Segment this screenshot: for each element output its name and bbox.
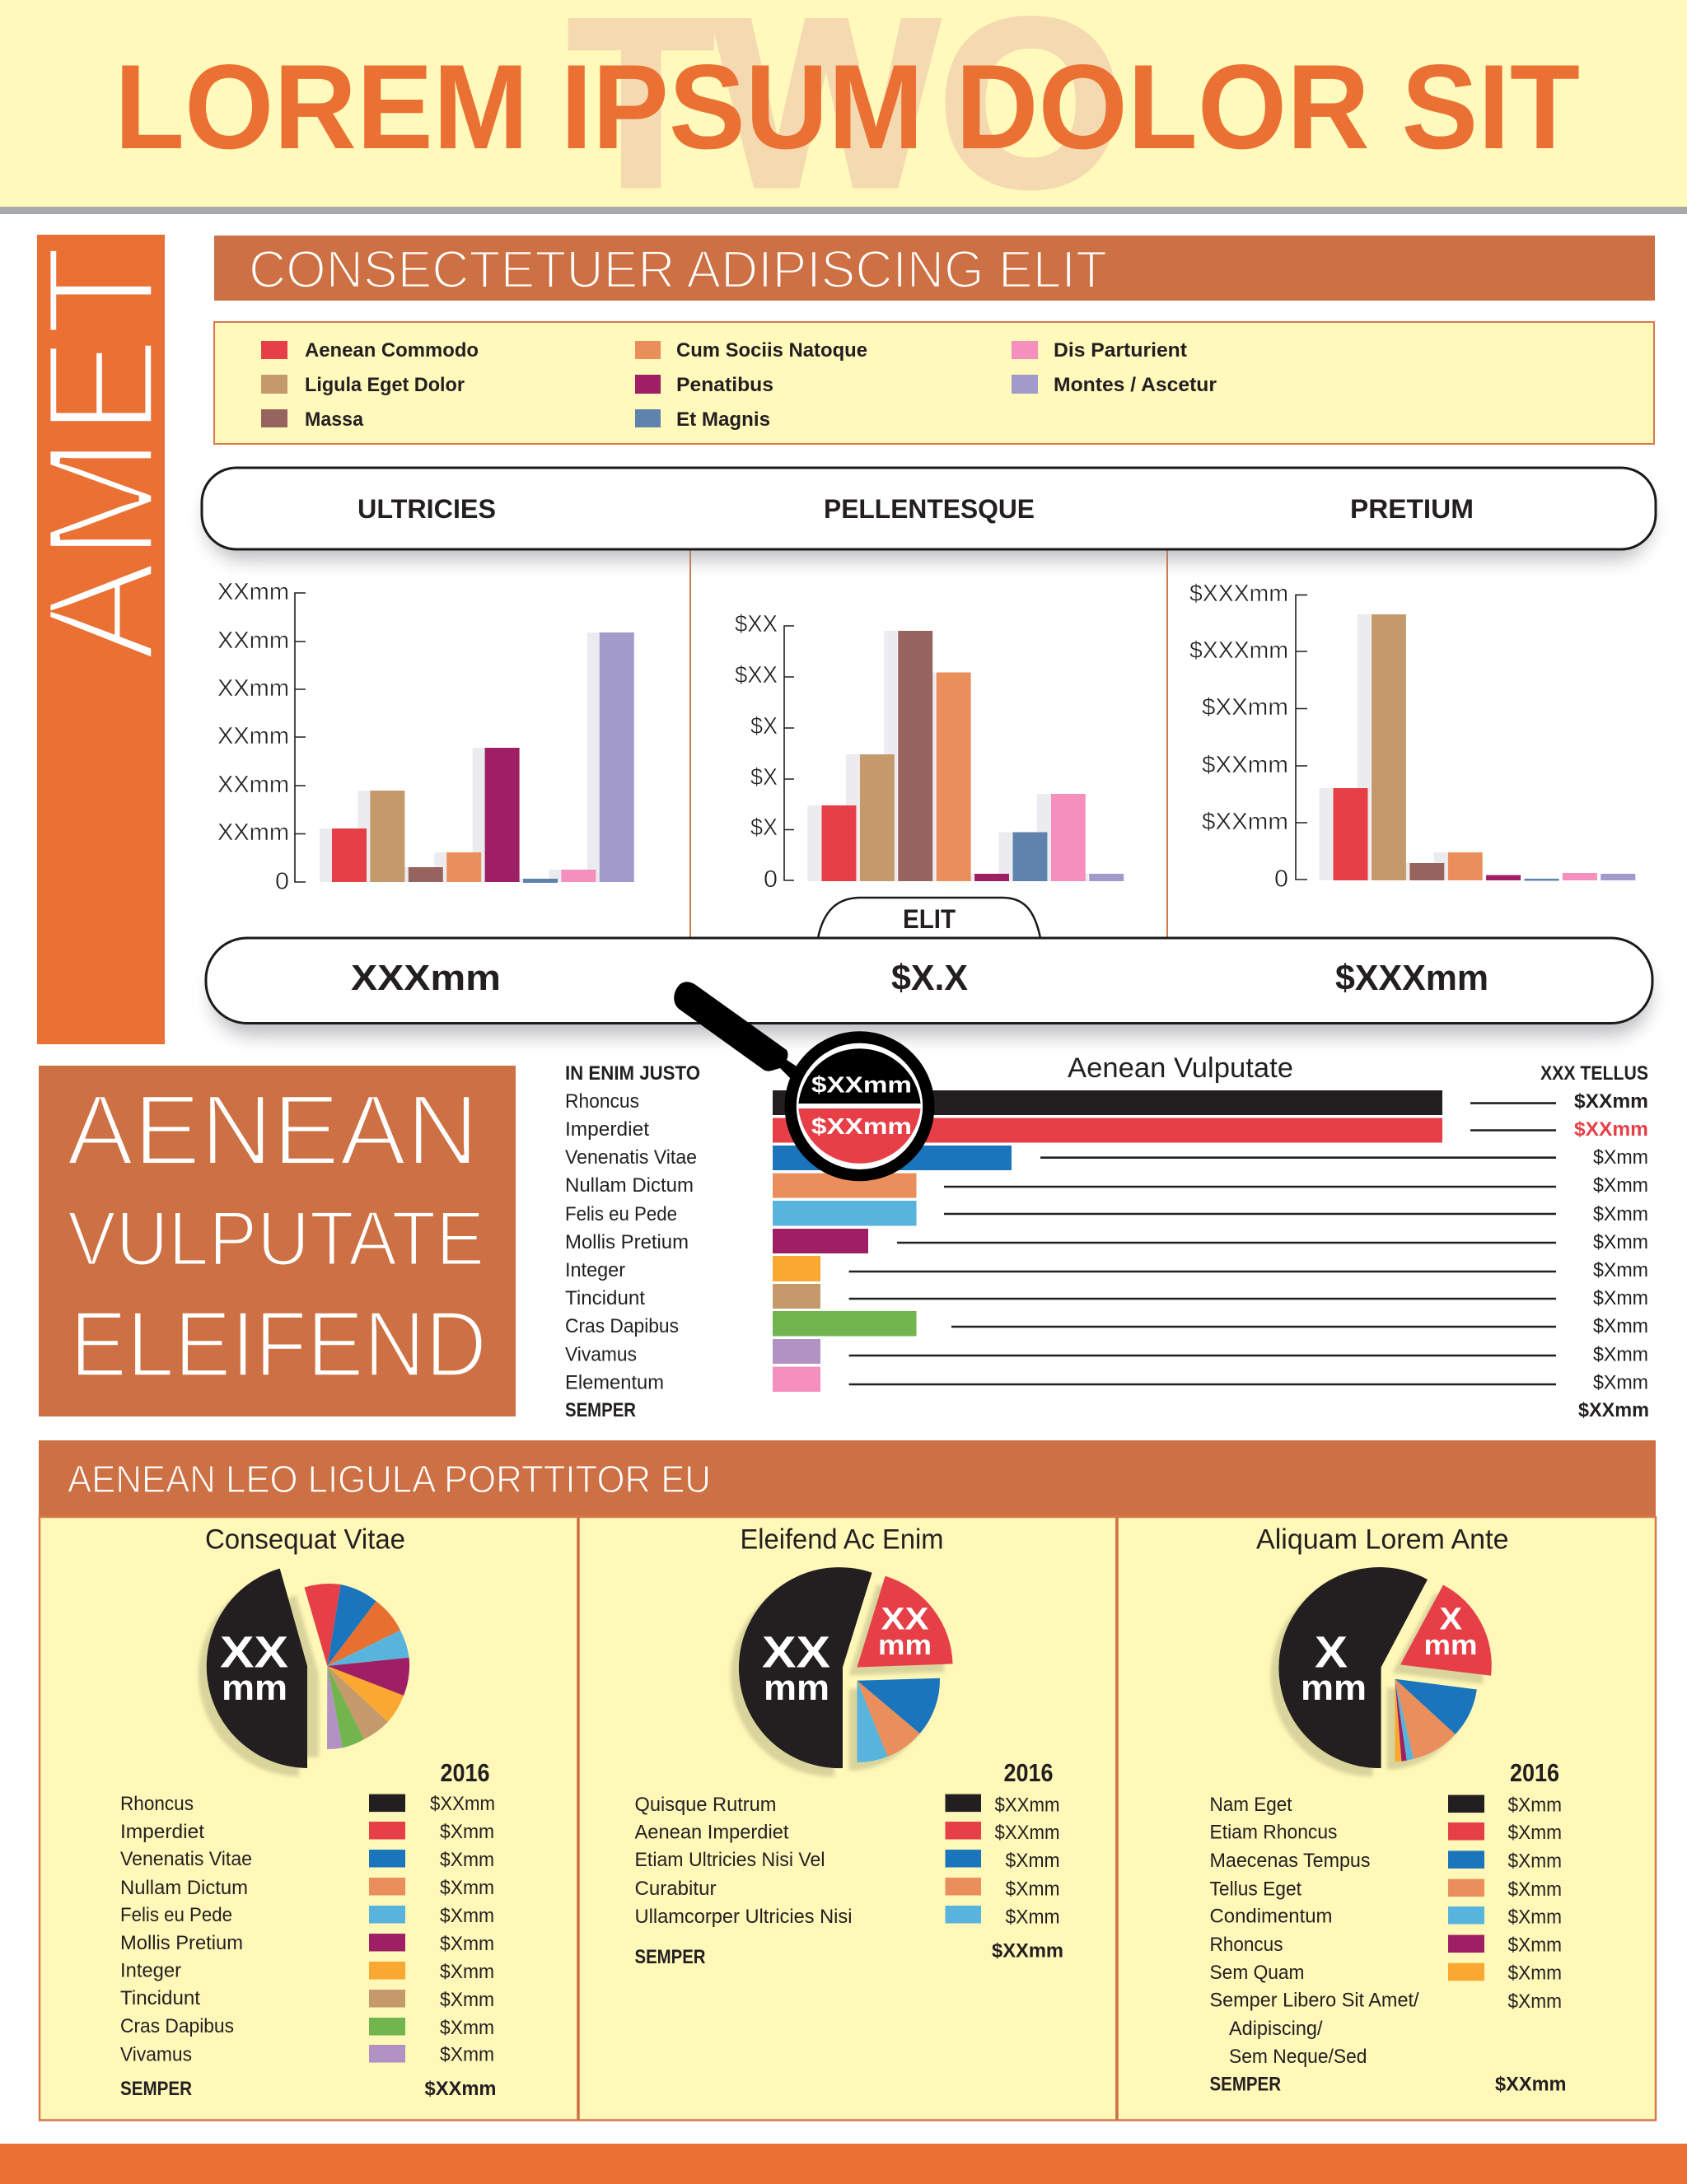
pie chart: consequat vitae: XX xyxy=(220,1627,288,1677)
section heading: consectetuer xyxy=(214,236,1655,301)
horizontal bar chart: aenean vulputate: Venenatis Vitae xyxy=(565,1146,697,1169)
legend: aliquam lorem ante: Etiam Rhoncus xyxy=(1209,1822,1338,1843)
bar chart: pretium: $XXmm xyxy=(1202,809,1288,835)
bar chart: pellentesque: $X xyxy=(750,713,778,740)
legend: consequat vitae: $Xmm xyxy=(440,1961,494,1983)
legend: consequat vitae: $Xmm xyxy=(440,1877,494,1899)
legend: aliquam lorem ante: $Xmm xyxy=(1507,1934,1562,1957)
pie chart: eleifend ac enim: mm xyxy=(764,1668,829,1708)
legend: aliquam lorem ante: $Xmm xyxy=(1507,1794,1562,1817)
legend: aliquam lorem ante: Semper Libero Sit Amet/ xyxy=(1209,1990,1419,2011)
totals pill: XXXmm xyxy=(351,958,501,998)
pie chart: eleifend ac enim: XX xyxy=(881,1603,929,1637)
header pill: PELLENTESQUE xyxy=(824,494,1035,524)
totals pill xyxy=(206,938,1652,1036)
bar chart: ultricies: XXmm xyxy=(217,723,289,749)
pie chart: eleifend ac enim: XX xyxy=(762,1627,830,1677)
legend: consequat vitae: Mollis Pretium xyxy=(120,1932,243,1954)
header pill xyxy=(202,468,1656,560)
bar chart: pellentesque: $X xyxy=(750,814,778,841)
panel: eleifend ac enim: Eleifend Ac Enim xyxy=(740,1524,944,1555)
bar chart: pretium: $XXmm xyxy=(1202,694,1288,721)
title: LOREM IPSUM DOLOR SIT xyxy=(114,40,1580,174)
panel: eleifend ac enim: 2016 xyxy=(1003,1758,1053,1787)
legend: aliquam lorem ante: $Xmm xyxy=(1507,1878,1562,1901)
legend panel: Cum Sociis Natoque xyxy=(676,339,867,362)
panel: aenean vulputate eleifend: AENEAN xyxy=(67,1074,479,1186)
panel: consequat vitae xyxy=(40,1517,578,2120)
horizontal bar chart: aenean vulputate: Felis eu Pede xyxy=(565,1203,677,1225)
panel: eleifend ac enim xyxy=(578,1517,1117,2120)
legend: aliquam lorem ante: $Xmm xyxy=(1507,1906,1562,1929)
pie chart: aliquam lorem ante: mm xyxy=(1301,1668,1367,1708)
legend: consequat vitae: $Xmm xyxy=(440,1933,494,1955)
legend: consequat vitae: $XXmm xyxy=(430,1793,495,1815)
legend: aliquam lorem ante: $Xmm xyxy=(1507,1962,1562,1985)
panel: consequat vitae: Consequat Vitae xyxy=(205,1524,405,1555)
bar chart: pellentesque: $X xyxy=(750,764,778,791)
legend: aliquam lorem ante: Adipiscing/ xyxy=(1229,2018,1323,2040)
horizontal bar chart: aenean vulputate: Elementum xyxy=(565,1372,664,1393)
side panel: AMET: AMET xyxy=(14,245,187,661)
pie chart: aliquam lorem ante: X xyxy=(1440,1603,1463,1637)
magnifier callout: $XXmm xyxy=(811,1072,912,1097)
legend: aliquam lorem ante: Rhoncus xyxy=(1209,1934,1283,1956)
legend: consequat vitae: Tincidunt xyxy=(120,1987,200,2009)
legend: consequat vitae: $Xmm xyxy=(440,2044,494,2065)
bar chart: pretium: $XXmm xyxy=(1202,752,1288,778)
panel: aenean vulputate eleifend: ELEIFEND xyxy=(70,1292,487,1396)
bar chart: pretium: $XXXmm xyxy=(1189,637,1288,664)
totals pill: $XXXmm xyxy=(1335,958,1488,998)
pie chart: eleifend ac enim: mm xyxy=(878,1630,932,1661)
legend: consequat vitae: Felis eu Pede xyxy=(120,1904,232,1926)
panel: aenean vulputate eleifend: VULPUTATE xyxy=(68,1195,484,1281)
legend: eleifend ac enim: $XXmm xyxy=(995,1822,1059,1844)
tab: ELIT xyxy=(818,898,1040,938)
horizontal bar chart: aenean vulputate: $Xmm xyxy=(1593,1146,1648,1169)
legend: consequat vitae: Cras Dapibus xyxy=(120,2015,234,2037)
legend panel: Dis Parturient xyxy=(1054,339,1187,362)
legend panel xyxy=(214,322,1654,444)
bar chart: ultricies: XXmm xyxy=(217,628,289,654)
magnifier callout xyxy=(674,982,934,1181)
pie chart: aliquam lorem ante: X xyxy=(1315,1627,1348,1677)
legend: aliquam lorem ante: $Xmm xyxy=(1507,1822,1562,1844)
header band xyxy=(0,0,1687,214)
legend: consequat vitae: Rhoncus xyxy=(120,1793,194,1815)
legend: consequat vitae: $Xmm xyxy=(440,1989,494,2011)
legend: eleifend ac enim: $Xmm xyxy=(1005,1878,1059,1901)
legend: aliquam lorem ante: Sem Neque/Sed xyxy=(1229,2046,1367,2068)
legend: eleifend ac enim: $XXmm xyxy=(992,1940,1063,1962)
legend: consequat vitae: Imperdiet xyxy=(120,1821,204,1843)
footer band xyxy=(0,2144,1687,2184)
legend: eleifend ac enim: $Xmm xyxy=(1005,1850,1059,1872)
legend: consequat vitae: Nullam Dictum xyxy=(120,1877,248,1899)
legend panel: Et Magnis xyxy=(676,408,770,431)
horizontal bar chart: aenean vulputate xyxy=(565,1052,1649,1421)
legend: consequat vitae: Vivamus xyxy=(120,2044,192,2065)
horizontal bar chart: aenean vulputate: Rhoncus xyxy=(565,1090,639,1113)
bar chart: ultricies xyxy=(217,579,634,894)
horizontal bar chart: aenean vulputate: Imperdiet xyxy=(565,1118,649,1141)
bar chart: pellentesque: $XX xyxy=(735,662,778,688)
horizontal bar chart: aenean vulputate: Mollis Pretium xyxy=(565,1231,689,1253)
legend: aliquam lorem ante: $Xmm xyxy=(1507,1990,1562,2013)
legend: eleifend ac enim: Ullamcorper Ultricies Nisi xyxy=(634,1906,852,1928)
legend: consequat vitae: $XXmm xyxy=(425,2078,496,2100)
bar chart: pellentesque: $XX xyxy=(735,611,778,637)
horizontal bar chart: aenean vulputate: Integer xyxy=(565,1259,625,1281)
horizontal bar chart: aenean vulputate: Cras Dapibus xyxy=(565,1315,679,1337)
column dividers xyxy=(690,549,1167,938)
pie chart: consequat vitae xyxy=(199,1569,409,1776)
legend: aliquam lorem ante xyxy=(1209,1794,1567,2095)
section heading: consectetuer: CONSECTETUER ADIPISCING ELIT xyxy=(249,240,1107,299)
header pill: PRETIUM xyxy=(1350,494,1474,524)
legend: consequat vitae: Integer xyxy=(120,1960,181,1981)
legend panel: Penatibus xyxy=(676,374,773,396)
bar chart: ultricies: XXmm xyxy=(217,579,289,605)
legend: aliquam lorem ante: Sem Quam xyxy=(1209,1962,1305,1984)
header pill: ULTRICIES xyxy=(357,494,496,524)
bar chart: ultricies: XXmm xyxy=(217,819,289,846)
legend: eleifend ac enim: Etiam Ultricies Nisi Vel xyxy=(634,1849,825,1871)
legend panel: Massa xyxy=(305,408,364,431)
section heading: aenean leo xyxy=(39,1440,1656,1517)
legend panel: Aenean Commodo xyxy=(305,339,479,362)
tab: ELIT: ELIT xyxy=(903,904,956,934)
panel: aliquam lorem ante: Aliquam Lorem Ante xyxy=(1256,1524,1509,1555)
horizontal bar chart: aenean vulputate: $XXmm xyxy=(1574,1118,1648,1141)
panel: aenean vulputate eleifend xyxy=(39,1066,516,1416)
bar chart: ultricies: XXmm xyxy=(217,675,289,702)
legend: consequat vitae: $Xmm xyxy=(440,1905,494,1927)
legend: consequat vitae: SEMPER xyxy=(120,2078,192,2100)
legend: eleifend ac enim: Quisque Rutrum xyxy=(634,1794,776,1816)
legend: consequat vitae: $Xmm xyxy=(440,1849,494,1871)
horizontal bar chart: aenean vulputate: SEMPER xyxy=(565,1399,636,1421)
panel: aliquam lorem ante: 2016 xyxy=(1510,1758,1559,1787)
bar chart: pretium xyxy=(1189,581,1635,893)
bar chart: ultricies: XXmm xyxy=(217,772,289,798)
legend: aliquam lorem ante: SEMPER xyxy=(1209,2074,1281,2095)
legend: eleifend ac enim: $Xmm xyxy=(1005,1906,1059,1929)
horizontal bar chart: aenean vulputate: IN ENIM JUSTO xyxy=(565,1062,700,1085)
magnifier callout: $XXmm xyxy=(811,1113,912,1139)
panel: aliquam lorem ante xyxy=(1117,1517,1656,2120)
horizontal bar chart: aenean vulputate: $Xmm xyxy=(1593,1174,1648,1197)
pie chart: eleifend ac enim xyxy=(731,1567,953,1776)
legend: eleifend ac enim: $XXmm xyxy=(995,1794,1059,1817)
legend: aliquam lorem ante: $XXmm xyxy=(1495,2074,1567,2095)
horizontal bar chart: aenean vulputate: $Xmm xyxy=(1593,1231,1648,1253)
horizontal bar chart: aenean vulputate: Nullam Dictum xyxy=(565,1174,694,1197)
bar chart: pretium: $XXXmm xyxy=(1189,581,1288,607)
legend: consequat vitae: $Xmm xyxy=(440,2017,494,2039)
pie chart: aliquam lorem ante xyxy=(1270,1567,1492,1776)
bar chart: pretium: 0 xyxy=(1274,866,1288,893)
bar chart: pellentesque xyxy=(735,611,1124,893)
legend: aliquam lorem ante: Maecenas Tempus xyxy=(1209,1850,1371,1872)
horizontal bar chart: aenean vulputate: $Xmm xyxy=(1593,1372,1648,1393)
bar chart: pellentesque: 0 xyxy=(764,866,778,893)
legend: aliquam lorem ante: Nam Eget xyxy=(1209,1794,1292,1816)
panel: consequat vitae: 2016 xyxy=(440,1758,489,1787)
totals pill: $X.X xyxy=(891,958,968,998)
legend: consequat vitae: Venenatis Vitae xyxy=(120,1848,252,1870)
horizontal bar chart: aenean vulputate: $Xmm xyxy=(1593,1287,1648,1309)
legend: consequat vitae xyxy=(120,1793,496,2100)
horizontal bar chart: aenean vulputate: $Xmm xyxy=(1593,1203,1648,1225)
legend: eleifend ac enim: Curabitur xyxy=(634,1878,717,1900)
section heading: aenean leo: AENEAN LEO LIGULA PORTTITOR EU xyxy=(68,1458,711,1500)
horizontal bar chart: aenean vulputate: $Xmm xyxy=(1593,1315,1648,1337)
pie chart: consequat vitae: mm xyxy=(222,1668,287,1708)
horizontal bar chart: aenean vulputate: $Xmm xyxy=(1593,1259,1648,1281)
pie chart: aliquam lorem ante: mm xyxy=(1423,1630,1478,1661)
legend: eleifend ac enim xyxy=(634,1794,1063,1968)
horizontal bar chart: aenean vulputate: Aenean Vulputate xyxy=(1068,1052,1293,1084)
horizontal bar chart: aenean vulputate: $XXmm xyxy=(1578,1399,1649,1421)
horizontal bar chart: aenean vulputate: Vivamus xyxy=(565,1344,637,1365)
bar chart: ultricies: 0 xyxy=(275,868,289,894)
legend: aliquam lorem ante: $Xmm xyxy=(1507,1850,1562,1873)
legend: aliquam lorem ante: Tellus Eget xyxy=(1209,1878,1301,1901)
horizontal bar chart: aenean vulputate: Tincidunt xyxy=(565,1287,645,1309)
horizontal bar chart: aenean vulputate: $Xmm xyxy=(1593,1344,1648,1365)
legend: consequat vitae: $Xmm xyxy=(440,1821,494,1843)
side panel: AMET xyxy=(14,235,187,1044)
horizontal bar chart: aenean vulputate: $XXmm xyxy=(1574,1090,1648,1113)
legend panel: Montes / Ascetur xyxy=(1054,374,1217,396)
horizontal bar chart: aenean vulputate: XXX TELLUS xyxy=(1540,1062,1648,1085)
legend panel: Ligula Eget Dolor xyxy=(305,374,465,396)
legend: aliquam lorem ante: Condimentum xyxy=(1209,1906,1333,1927)
legend: eleifend ac enim: SEMPER xyxy=(634,1946,705,1968)
legend: eleifend ac enim: Aenean Imperdiet xyxy=(634,1822,789,1843)
